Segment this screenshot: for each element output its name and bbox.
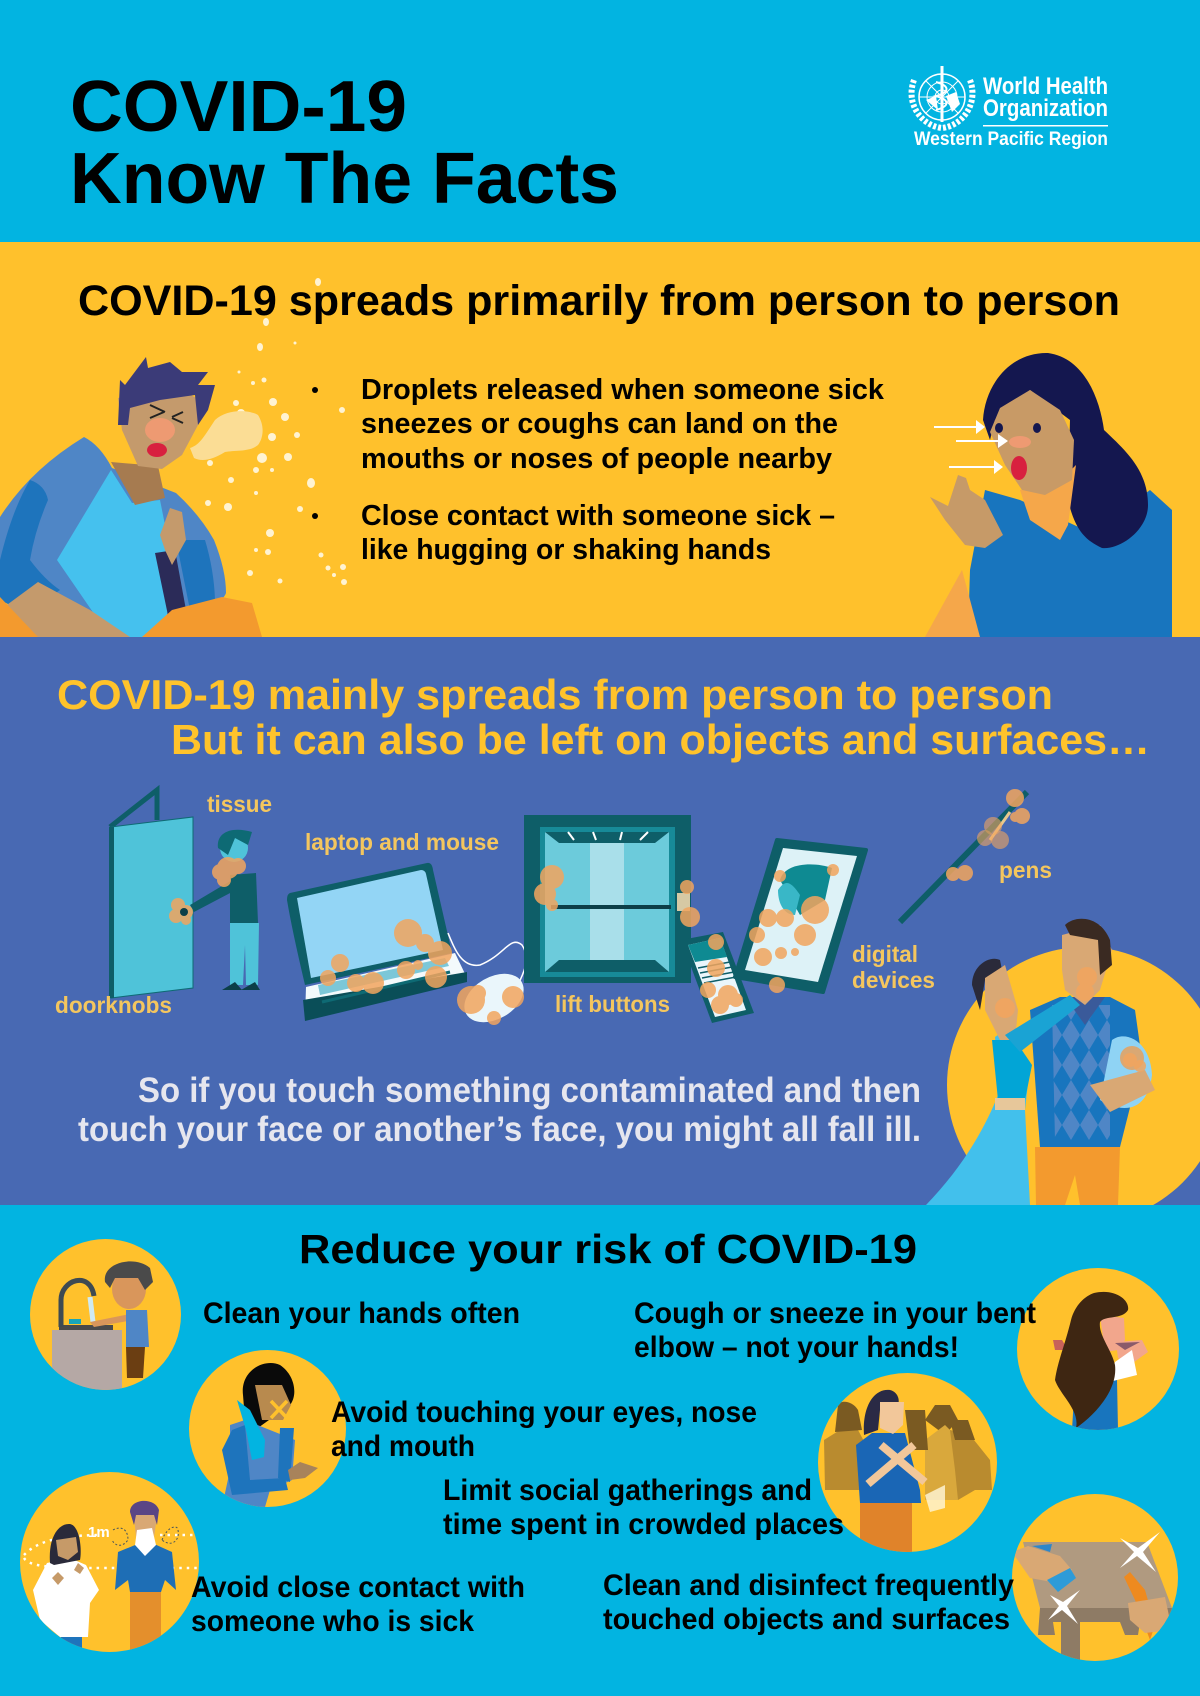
icon: limit gatherings bbox=[818, 1373, 997, 1552]
illustration: woman exposed to droplets bbox=[925, 353, 1172, 637]
woman dress bbox=[926, 1030, 1030, 1205]
text: cough advice bbox=[634, 1297, 1036, 1364]
heading bbox=[57, 671, 1150, 763]
bullet list: like hugging or shaking hands bbox=[361, 534, 771, 566]
text block: warning: So if you touch something contaminated and then bbox=[138, 1071, 921, 1110]
bullet list: sneezes or coughs can land on the bbox=[361, 408, 838, 440]
text: clean hands: Clean your hands often bbox=[203, 1297, 520, 1330]
neck and face bbox=[111, 462, 165, 505]
baby bbox=[1100, 1036, 1152, 1108]
man trousers bbox=[1035, 1147, 1120, 1205]
label: digital devices: devices bbox=[852, 967, 935, 993]
label: digital devices: digital bbox=[852, 941, 918, 967]
arrows bbox=[934, 420, 1008, 474]
woman head bbox=[972, 959, 1002, 1010]
hair bbox=[118, 357, 215, 425]
icon: clean surfaces bbox=[1012, 1494, 1178, 1661]
heading: Reduce your risk of COVID-19 bbox=[299, 1226, 917, 1272]
hair bbox=[983, 353, 1148, 548]
woman arm bbox=[1005, 995, 1080, 1052]
logo: World Health Organization: Organization bbox=[983, 95, 1108, 122]
panel: spread on objects and surfaces bbox=[0, 637, 1200, 1223]
hand bbox=[930, 475, 1003, 548]
illustration: sneezing man bbox=[0, 357, 263, 637]
text: clean surfaces: Clean and disinfect frequently bbox=[603, 1569, 1014, 1602]
text: avoid touching face bbox=[331, 1396, 757, 1463]
icon: WHO emblem bbox=[912, 66, 972, 128]
bullet list: Close contact with someone sick – bbox=[361, 500, 835, 532]
text: avoid touching face: and mouth bbox=[331, 1430, 475, 1463]
text: avoid touching face: Avoid touching your eyes, nose bbox=[331, 1396, 757, 1429]
text block: warning bbox=[78, 1071, 921, 1149]
title: COVID-19 bbox=[70, 67, 407, 147]
sweater bbox=[968, 490, 1172, 637]
scarf bbox=[1020, 465, 1076, 540]
illustration: man sneezing bbox=[169, 830, 260, 990]
label: digital devices bbox=[852, 941, 935, 993]
logo: World Health Organization: World Health bbox=[983, 73, 1108, 100]
icon: cough into elbow bbox=[1017, 1268, 1179, 1430]
illustration: tablet bbox=[735, 840, 866, 993]
label: laptop and mouse: laptop and mouse bbox=[305, 829, 499, 855]
icon: sparkles bbox=[1120, 1532, 1160, 1572]
bullet list: mouths or noses of people nearby bbox=[361, 443, 832, 475]
text: limit gatherings bbox=[443, 1474, 844, 1541]
label: 1m: 1m bbox=[88, 1524, 110, 1541]
title bbox=[70, 67, 619, 219]
illustration: lift bbox=[524, 815, 700, 983]
icon: keep 1m distance bbox=[20, 1472, 199, 1652]
heading: COVID-19 spreads primarily from person to person bbox=[78, 277, 1120, 325]
face bbox=[990, 390, 1074, 495]
label: pens: pens bbox=[999, 857, 1052, 883]
illustration: family touching faces bbox=[926, 919, 1200, 1223]
man sweater bbox=[1030, 997, 1142, 1147]
illustration: laptop and mouse bbox=[287, 863, 532, 1032]
text: cough advice: elbow – not your hands! bbox=[634, 1331, 959, 1364]
label: doorknobs: doorknobs bbox=[55, 992, 172, 1018]
illustration: phone bbox=[681, 932, 754, 1023]
text: limit gatherings: time spent in crowded places bbox=[443, 1508, 844, 1541]
droplets bbox=[205, 278, 347, 585]
logo: World Health Organization bbox=[912, 66, 1108, 150]
panel: header bbox=[70, 66, 1108, 219]
text: avoid close contact: someone who is sick bbox=[191, 1605, 474, 1638]
illustration: door bbox=[109, 790, 193, 998]
bullet list bbox=[312, 374, 885, 566]
hand and leg bbox=[160, 508, 186, 565]
panel: person to person spread bbox=[0, 242, 1200, 637]
label: tissue: tissue bbox=[207, 791, 272, 817]
icon: hand washing bbox=[30, 1239, 181, 1390]
cough cloud bbox=[190, 411, 263, 460]
text: avoid close contact: Avoid close contact with bbox=[191, 1571, 525, 1604]
text: limit gatherings: Limit social gatherings and bbox=[443, 1474, 812, 1507]
text block: warning: touch your face or another’s face, you might all fall ill. bbox=[78, 1110, 921, 1149]
heading: COVID-19 mainly spreads from person to person bbox=[57, 671, 1053, 718]
heading: But it can also be left on objects and surfaces… bbox=[171, 716, 1150, 763]
text: cough advice: Cough or sneeze in your bent bbox=[634, 1297, 1036, 1330]
panel: reduce your risk bbox=[15, 1226, 1185, 1668]
title: Know The Facts bbox=[70, 139, 619, 219]
text: avoid close contact bbox=[191, 1571, 525, 1638]
illustration: pen bbox=[900, 789, 1030, 922]
text: clean surfaces: touched objects and surfaces bbox=[603, 1603, 1010, 1636]
label: lift buttons: lift buttons bbox=[555, 991, 670, 1017]
text: clean surfaces bbox=[603, 1569, 1014, 1636]
logo: World Health Organization: Western Pacific Region bbox=[914, 129, 1108, 150]
shirt bbox=[57, 470, 172, 637]
icon: avoid touching face bbox=[185, 1345, 350, 1510]
bullet list: Droplets released when someone sick bbox=[361, 374, 885, 406]
blanket bbox=[0, 437, 226, 620]
man head bbox=[1062, 925, 1112, 1005]
